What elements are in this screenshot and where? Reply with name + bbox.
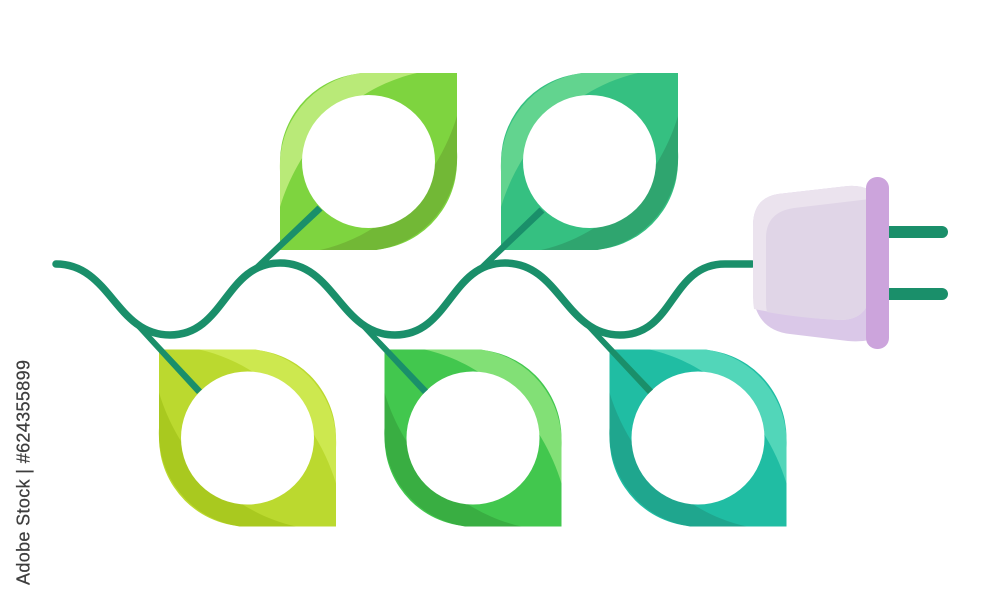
plug flange — [866, 177, 889, 349]
side credit text: Adobe Stock | #624355899 — [14, 360, 34, 585]
wavy cable — [56, 263, 752, 335]
stems connecting leaves to the cable — [131, 206, 653, 394]
leaf: bottom left — [159, 350, 336, 526]
plug body — [753, 186, 870, 341]
leaf: bottom middle — [384, 350, 562, 526]
leaf: top left — [280, 73, 457, 250]
leaf: bottom right — [609, 350, 787, 526]
leaf: top right — [501, 73, 678, 250]
plug prongs — [880, 226, 948, 300]
icon: electric plug — [753, 177, 948, 349]
